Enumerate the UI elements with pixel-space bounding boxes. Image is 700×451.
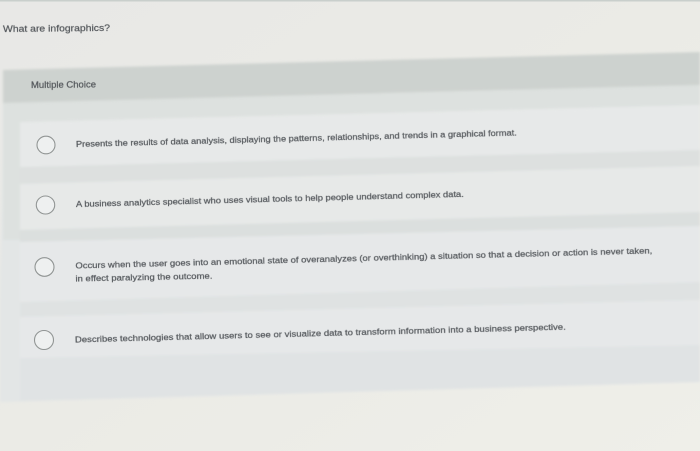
icon: radio button 2 xyxy=(36,196,55,214)
heading: multiple choice: Multiple Choice xyxy=(31,79,96,90)
option 4 xyxy=(34,322,566,350)
option 2 text: A business analytics specialist who uses visual tools to help people understand complex data. xyxy=(76,189,464,209)
divider band 1 xyxy=(20,150,700,184)
option 1 text: Presents the results of data analysis, displaying the patterns, relationships, and trends in a graphical format. xyxy=(76,127,517,149)
option 3 xyxy=(35,245,652,283)
option 1 xyxy=(37,127,517,154)
option 3 text line 2: in effect paralyzing the outcome. xyxy=(75,271,213,283)
panel: option row 3 xyxy=(20,226,700,302)
panel: option row 1 xyxy=(20,105,700,167)
panel: option row 4 xyxy=(20,300,700,358)
icon: radio button 4 xyxy=(34,330,54,350)
panel: multiple choice header xyxy=(3,52,700,103)
option 3 text line 1: Occurs when the user goes into an emotional state of overanalyzes (or overthinking) a situation so that a decision or action is never taken, xyxy=(75,245,652,270)
bottom band xyxy=(20,345,700,401)
icon: radio button 3 xyxy=(35,258,54,276)
divider band 3 xyxy=(20,282,700,317)
divider band 2 xyxy=(20,212,700,242)
panel: question bands xyxy=(0,52,700,402)
option 4 text: Describes technologies that allow users to see or visualize data to transform information into a business perspective. xyxy=(75,322,566,344)
icon: radio button 1 xyxy=(37,136,55,154)
option 2 xyxy=(36,189,464,214)
panel: option row 2 xyxy=(20,166,700,230)
title: What are infographics? xyxy=(3,23,110,35)
